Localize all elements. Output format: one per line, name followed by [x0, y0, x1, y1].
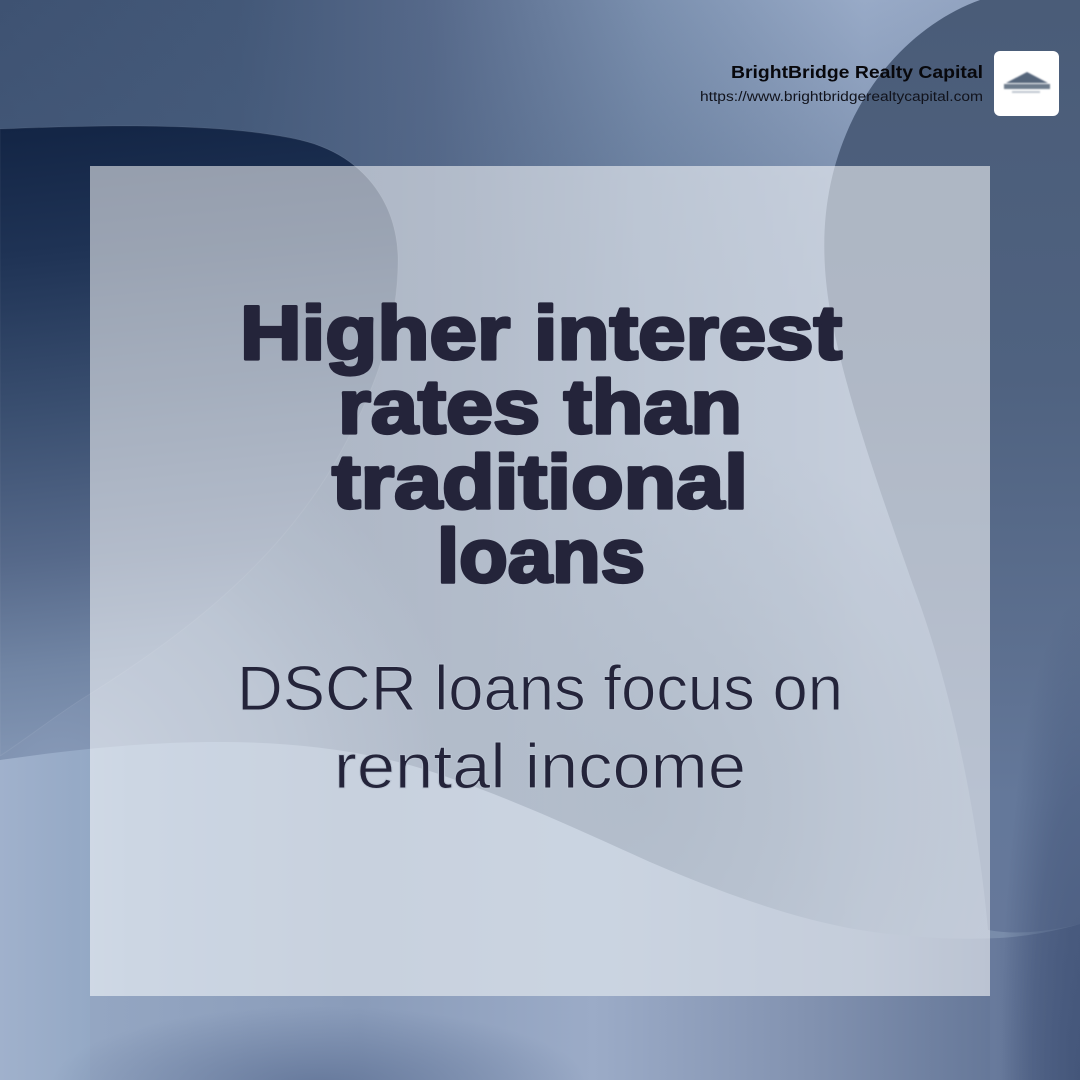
heading: rates than [338, 365, 742, 450]
logo tile [994, 51, 1059, 116]
background: shadow band along the bottom [50, 1000, 590, 1080]
background: strip below the panel [90, 996, 990, 1080]
subheading: DSCR loans focus on [237, 654, 843, 724]
background: dark curved shape right [824, 0, 1080, 932]
subheading: rental income [334, 732, 746, 802]
heading: traditional [332, 440, 748, 525]
background: right edge shading [1000, 600, 1080, 1080]
brand name: BrightBridge Realty Capital [731, 62, 983, 82]
brand url: https://www.brightbridgerealtycapital.com [700, 89, 983, 104]
background: lower wave [0, 742, 1080, 1080]
translucent content panel [90, 166, 990, 996]
background: dark curved shape top left [0, 126, 398, 756]
heading [240, 291, 842, 599]
heading: Higher interest [240, 291, 842, 376]
subheading [237, 654, 843, 802]
heading: loans [437, 514, 645, 599]
